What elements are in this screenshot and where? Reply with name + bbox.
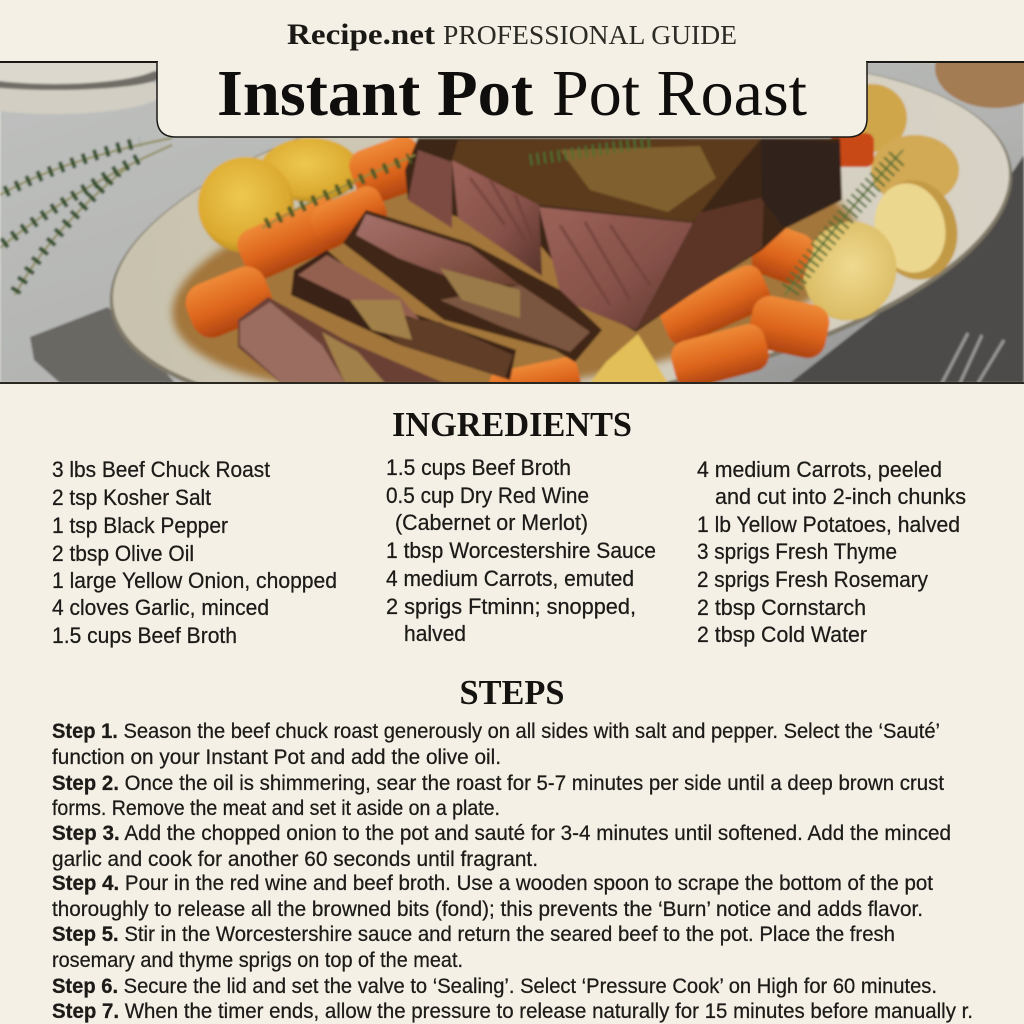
left napkin xyxy=(30,307,175,383)
steps text: garlic and cook for another 60 seconds until fragrant. xyxy=(52,848,538,871)
ingredients column 2: 1.5 cups Beef Broth xyxy=(386,455,571,480)
steps heading: STEPS xyxy=(460,673,564,712)
steps text: Step 1. Season the beef chuck roast generously on all sides with salt and pepper. Select the ‘Sauté’ xyxy=(52,720,940,743)
steps text xyxy=(52,720,973,1023)
title regular: Pot Roast xyxy=(552,57,807,130)
ingredients column 3: 2 tbsp Cold Water xyxy=(697,622,867,647)
ingredients column 1: 2 tbsp Olive Oil xyxy=(52,541,194,566)
ingredients column 1: 1 large Yellow Onion, chopped xyxy=(52,568,337,593)
ingredients column 3: 2 tbsp Cornstarch xyxy=(697,595,866,620)
roast grain xyxy=(470,178,650,305)
steps text: Step 3. Add the chopped onion to the pot and sauté for 3-4 minutes until softened. Add the minced xyxy=(52,822,951,845)
right napkin xyxy=(790,155,1024,383)
brand subtitle: PROFESSIONAL GUIDE xyxy=(443,20,737,50)
ingredients heading: INGREDIENTS xyxy=(392,405,632,444)
thyme sprig on platter xyxy=(262,155,415,228)
steps text: Step 6. Secure the lid and set the valve to ‘Sealing’. Select ‘Pressure Cook’ on High for 60 minutes. xyxy=(52,975,937,998)
hero photo: pot roast platter xyxy=(0,63,1024,382)
steps text: Step 5. Stir in the Worcestershire sauce and return the seared beef to the pot. Place the fresh xyxy=(52,923,895,946)
ingredients column 2: (Cabernet or Merlot) xyxy=(395,510,588,535)
ingredients column 2: 0.5 cup Dry Red Wine xyxy=(386,483,589,508)
steps text: function on your Instant Pot and add the olive oil. xyxy=(52,746,501,769)
ingredients column 1: 2 tsp Kosher Salt xyxy=(52,485,211,510)
title tab xyxy=(157,62,867,137)
steps text: Step 7. When the timer ends, allow the pressure to release naturally for 15 minutes before manually r. xyxy=(52,1000,973,1023)
potatoes right xyxy=(590,84,966,383)
steps text: forms. Remove the meat and set it aside on a plate. xyxy=(52,797,500,820)
table surface xyxy=(0,62,1024,383)
ingredients column 1: 4 cloves Garlic, minced xyxy=(52,595,269,620)
meat slices xyxy=(238,210,602,383)
steps text: rosemary and thyme sprigs on top of the meat. xyxy=(52,949,463,972)
photo bottom rule xyxy=(0,382,1024,384)
platter xyxy=(108,72,1014,382)
steps text: Step 2. Once the oil is shimmering, sear the roast for 5-7 minutes per side until a deep brown crust xyxy=(52,772,944,795)
ingredients column 1: 3 lbs Beef Chuck Roast xyxy=(52,457,270,482)
photo top rule right xyxy=(866,61,1024,63)
ingredients column 3: 3 sprigs Fresh Thyme xyxy=(697,539,897,564)
ingredients column 2 xyxy=(386,455,656,646)
ingredients column 1: 1.5 cups Beef Broth xyxy=(52,623,237,648)
ingredients column 3: and cut into 2-inch chunks xyxy=(715,484,966,509)
carrots xyxy=(180,131,874,411)
ingredients column 2: halved xyxy=(404,621,466,646)
ingredients column 3: 2 sprigs Fresh Rosemary xyxy=(697,567,928,592)
ingredients column 3 xyxy=(697,457,966,647)
steps text: Step 4. Pour in the red wine and beef broth. Use a wooden spoon to scrape the bottom of the pot xyxy=(52,872,933,895)
stacked plates xyxy=(0,63,156,114)
rosemary sprigs xyxy=(530,142,903,295)
whole roast xyxy=(405,138,842,332)
ingredients column 1: 1 tsp Black Pepper xyxy=(52,513,228,538)
brand line: Recipe.net xyxy=(287,18,435,51)
ingredients column 2: 1 tbsp Worcestershire Sauce xyxy=(386,538,656,563)
wooden bowl xyxy=(934,63,1024,109)
title bold: Instant Pot xyxy=(217,57,533,130)
thyme sprig left xyxy=(0,138,172,295)
ingredients column 3: 4 medium Carrots, peeled xyxy=(697,457,942,482)
fork xyxy=(942,333,1004,383)
ingredients column 1 xyxy=(52,457,337,648)
photo top rule left xyxy=(0,61,158,63)
potatoes upper left xyxy=(198,138,360,253)
ingredients column 2: 4 medium Carrots, emuted xyxy=(386,566,634,591)
ingredients column 3: 1 lb Yellow Potatoes, halved xyxy=(697,512,960,537)
ingredients column 2: 2 sprigs Ftminn; snopped, xyxy=(386,594,636,619)
steps text: thoroughly to release all the browned bits (fond); this prevents the ‘Burn’ notice and adds flavor. xyxy=(52,898,923,921)
